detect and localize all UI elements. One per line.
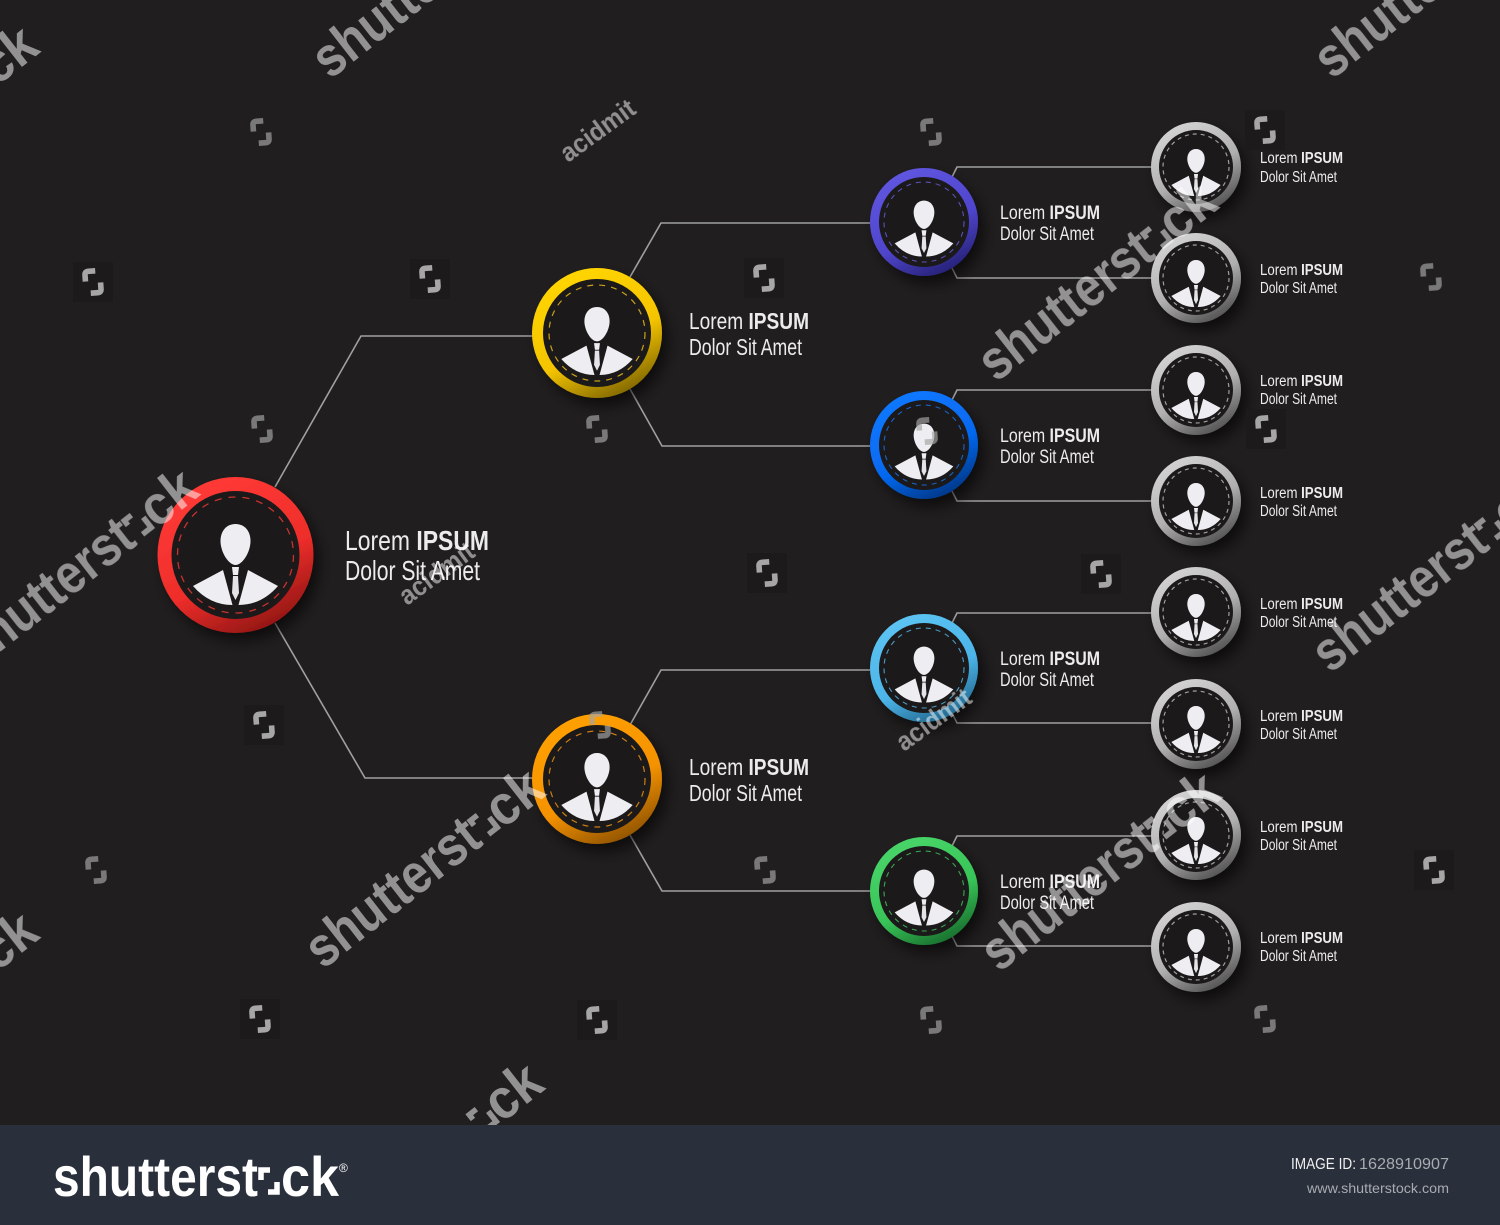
node: leaf 5 bbox=[1151, 567, 1241, 657]
node: leaf 4 bbox=[1151, 456, 1241, 546]
label: green node bbox=[1000, 872, 1100, 914]
label: root: Lorem IPSUM bbox=[345, 525, 489, 556]
label: yellow node: Lorem IPSUM bbox=[689, 308, 809, 334]
watermark logos: shutterst bbox=[965, 217, 1165, 392]
label: root bbox=[345, 525, 489, 586]
watermark logos: ck bbox=[125, 454, 210, 539]
node: level 2 purple bbox=[870, 168, 978, 276]
label: leaf 7: Lorem IPSUM bbox=[1260, 819, 1343, 836]
watermark: acidmit bbox=[393, 93, 977, 757]
label: leaf 8: Dolor Sit Amet bbox=[1260, 948, 1338, 965]
label: root: Dolor Sit Amet bbox=[345, 555, 480, 586]
node: root red bbox=[158, 477, 314, 633]
label: leaf 8 bbox=[1260, 930, 1343, 965]
label: orange node: Lorem IPSUM bbox=[689, 754, 809, 780]
watermark icons bbox=[73, 110, 1454, 1040]
footer bar bbox=[0, 1125, 1500, 1225]
watermark logos: ck bbox=[1147, 757, 1232, 842]
node: level 2 blue bbox=[870, 391, 978, 499]
website url: www.shutterstock.com bbox=[1306, 1180, 1449, 1196]
watermark: acidmit: acidmit bbox=[554, 93, 641, 168]
image id: IMAGE ID: bbox=[1291, 1156, 1356, 1173]
node: leaf 6 bbox=[1151, 679, 1241, 769]
watermark logos: shutterst bbox=[968, 807, 1168, 982]
watermark logos: ck bbox=[1144, 167, 1229, 252]
label: leaf 6: Lorem IPSUM bbox=[1260, 708, 1343, 725]
node: leaf 1 bbox=[1151, 122, 1241, 212]
label: leaf 7 bbox=[1260, 819, 1343, 854]
label: light blue node: Lorem IPSUM bbox=[1000, 649, 1100, 670]
label: leaf 5 bbox=[1260, 596, 1343, 631]
label: orange node bbox=[689, 754, 809, 806]
label: leaf 1 bbox=[1260, 150, 1343, 186]
label: leaf 1: Lorem IPSUM bbox=[1260, 150, 1343, 167]
label: yellow node bbox=[689, 308, 809, 360]
node: leaf 3 bbox=[1151, 345, 1241, 435]
footer logo: shutterst bbox=[53, 1145, 258, 1208]
watermark: acidmit: acidmit bbox=[890, 682, 977, 757]
label: leaf 5: Dolor Sit Amet bbox=[1260, 614, 1338, 631]
label: leaf 1: Dolor Sit Amet bbox=[1260, 169, 1338, 186]
label: green node: Lorem IPSUM bbox=[1000, 872, 1100, 893]
label: purple node: Lorem IPSUM bbox=[1000, 203, 1100, 224]
label: green node: Dolor Sit Amet bbox=[1000, 893, 1095, 914]
node: leaf 7 bbox=[1151, 790, 1241, 880]
connector lines bbox=[275, 167, 1152, 946]
node: level 2 green bbox=[870, 837, 978, 945]
label: light blue node bbox=[1000, 649, 1100, 691]
label: yellow node: Dolor Sit Amet bbox=[689, 334, 802, 360]
node: leaf 2 bbox=[1151, 233, 1241, 323]
node: leaf 8 bbox=[1151, 902, 1241, 992]
label: purple node: Dolor Sit Amet bbox=[1000, 224, 1095, 245]
label: leaf 4: Lorem IPSUM bbox=[1260, 485, 1343, 502]
label: leaf 3 bbox=[1260, 373, 1343, 408]
label: blue node bbox=[1000, 426, 1100, 468]
label: leaf 2 bbox=[1260, 262, 1343, 297]
footer logo: ck bbox=[281, 1145, 340, 1208]
watermark: acidmit: acidmit bbox=[393, 536, 480, 611]
label: leaf 8: Lorem IPSUM bbox=[1260, 930, 1343, 947]
image id number: 1628910907 bbox=[1359, 1156, 1449, 1173]
node: level 1 orange bbox=[532, 714, 662, 844]
label: leaf 3: Dolor Sit Amet bbox=[1260, 391, 1338, 408]
label: blue node: Dolor Sit Amet bbox=[1000, 447, 1095, 468]
label: leaf 3: Lorem IPSUM bbox=[1260, 373, 1343, 390]
watermark logos: shutterst bbox=[292, 804, 492, 979]
label: leaf 2: Lorem IPSUM bbox=[1260, 262, 1343, 279]
label: leaf 6 bbox=[1260, 708, 1343, 743]
node: level 1 yellow bbox=[532, 268, 662, 398]
label: leaf 2: Dolor Sit Amet bbox=[1260, 280, 1338, 297]
label: purple node bbox=[1000, 203, 1100, 245]
label: leaf 5: Lorem IPSUM bbox=[1260, 596, 1343, 613]
label: orange node: Dolor Sit Amet bbox=[689, 780, 802, 806]
watermark logos: ck bbox=[470, 1048, 555, 1133]
label: leaf 6: Dolor Sit Amet bbox=[1260, 726, 1338, 743]
label: leaf 7: Dolor Sit Amet bbox=[1260, 837, 1338, 854]
watermark logos: ck bbox=[471, 754, 556, 839]
label: leaf 4 bbox=[1260, 485, 1343, 520]
label: leaf 4: Dolor Sit Amet bbox=[1260, 503, 1338, 520]
label: light blue node: Dolor Sit Amet bbox=[1000, 670, 1095, 691]
node: level 2 light blue bbox=[870, 614, 978, 722]
footer logo: ® bbox=[339, 1161, 348, 1175]
label: blue node: Lorem IPSUM bbox=[1000, 426, 1100, 447]
